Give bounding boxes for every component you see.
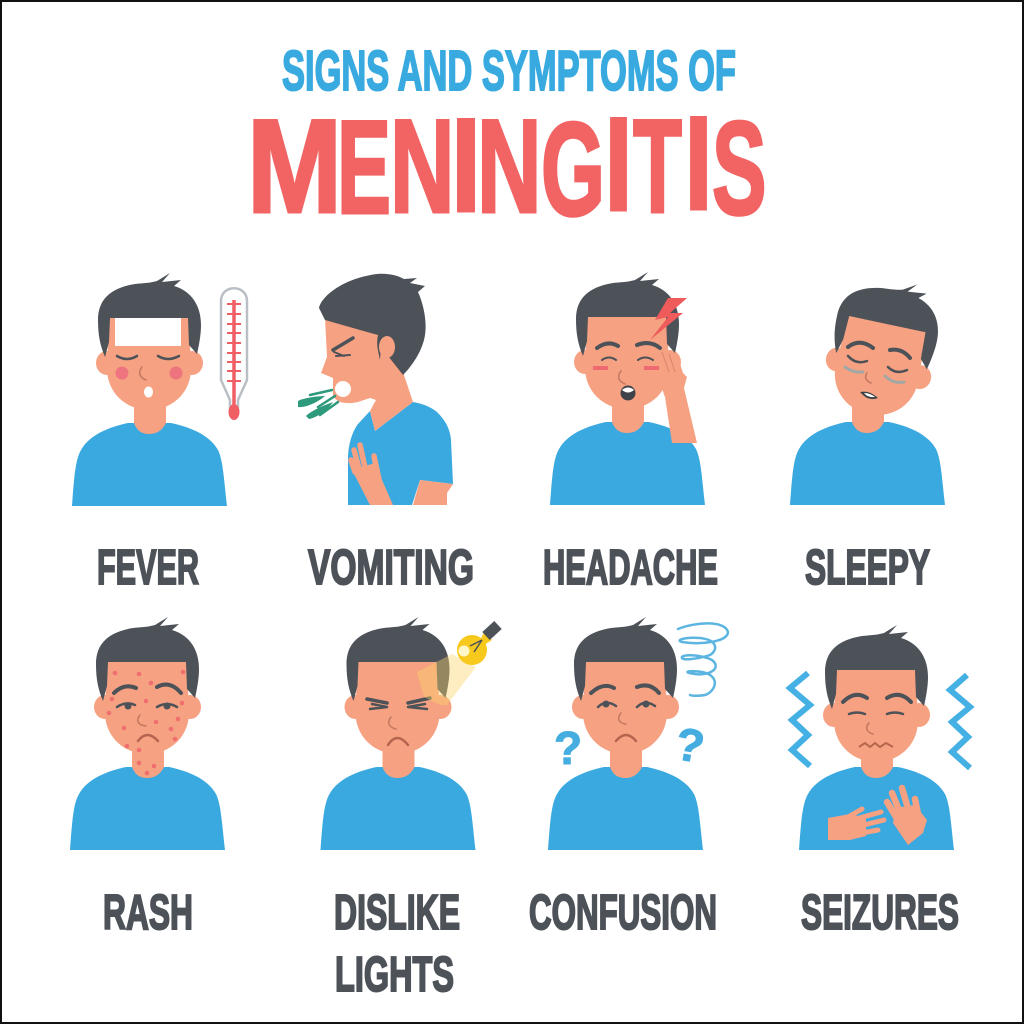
eyes — [602, 358, 653, 360]
figure: dislike lights — [320, 617, 498, 850]
subtitle: SIGNS AND SYMPTOMS OF — [282, 39, 736, 103]
mouth — [138, 735, 158, 741]
figure: seizures — [790, 625, 970, 850]
neck and face — [321, 318, 413, 431]
figure: fever — [72, 273, 247, 506]
icon: question marks: ? — [672, 717, 708, 773]
forehead patch — [115, 318, 181, 346]
mouth — [616, 735, 636, 741]
icon: light bulb — [457, 625, 498, 665]
shirt — [348, 402, 453, 505]
label: confusion: CONFUSION — [529, 886, 717, 940]
title: G — [541, 96, 605, 244]
left hand — [828, 809, 884, 840]
right hand — [887, 788, 927, 845]
title: T — [633, 93, 682, 241]
icon: dizzy spiral — [678, 623, 728, 696]
brows — [367, 698, 430, 703]
title: E — [337, 94, 391, 242]
brow and eye — [333, 338, 353, 350]
hand — [351, 445, 393, 505]
label: fever: FEVER — [97, 541, 199, 595]
figure: rash — [70, 617, 225, 850]
mouth — [620, 386, 636, 400]
brows — [597, 343, 660, 348]
label: sleepy: SLEEPY — [805, 541, 930, 595]
icon: vomit spray — [298, 390, 338, 419]
icon: lightning bolt — [650, 298, 687, 340]
title: M — [247, 93, 342, 241]
icon: question marks — [554, 717, 708, 774]
eyes — [848, 356, 907, 372]
figure: headache — [550, 272, 705, 505]
arm and hand — [658, 347, 697, 443]
label: dislike lights: DISLIKE — [334, 886, 460, 940]
label: dislike lights — [334, 886, 460, 1002]
figure: sleepy — [790, 269, 950, 505]
mouth — [860, 392, 878, 399]
icon: left tremor zigzag — [790, 673, 810, 766]
icon: question marks: ? — [554, 722, 582, 774]
title: N — [390, 93, 454, 241]
eyes — [598, 703, 655, 707]
brows — [848, 343, 910, 358]
light beam — [417, 654, 476, 705]
mouth — [859, 743, 893, 747]
icon: thermometer — [221, 288, 247, 420]
brows — [114, 685, 181, 693]
label: rash: RASH — [103, 886, 193, 940]
rash spots — [107, 670, 185, 775]
brows — [843, 695, 911, 702]
eyes — [849, 712, 903, 714]
title: I — [684, 90, 712, 238]
label: headache: HEADACHE — [543, 541, 718, 595]
brows — [591, 685, 659, 693]
mouth — [388, 738, 408, 745]
mouth — [335, 381, 351, 397]
title: I — [604, 91, 632, 239]
eyes — [117, 703, 177, 707]
icon: right tremor zigzag — [950, 675, 970, 768]
hair — [319, 274, 426, 375]
figure: vomiting — [298, 274, 453, 505]
label: dislike lights: LIGHTS — [335, 948, 454, 1002]
figure: confusion — [548, 617, 728, 850]
title: S — [712, 95, 766, 243]
eyes — [370, 704, 427, 709]
title: N — [477, 93, 542, 241]
eye bags — [845, 367, 904, 382]
title: I — [451, 92, 481, 240]
label: vomiting: VOMITING — [308, 541, 474, 595]
